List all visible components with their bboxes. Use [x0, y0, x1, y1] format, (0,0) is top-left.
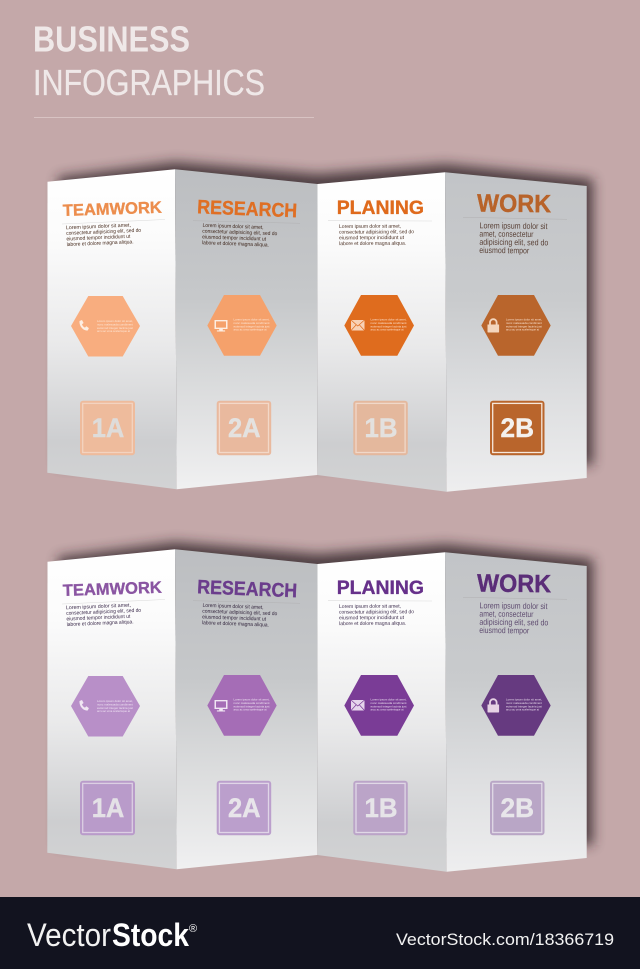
hexagon with monitor icon: Lorem ipsum dolor sit amet, — [234, 698, 270, 702]
hexagon with envelope icon: euismod integer lacinia just — [370, 704, 407, 708]
hexagon with phone icon: Lorem ipsum dolor sit amet, — [97, 319, 133, 323]
heading: teamwork: TEAMWORK — [63, 199, 162, 220]
hexagon with phone icon: Lorem ipsum dolor sit amet, — [97, 699, 133, 703]
heading: research: RESEARCH — [197, 196, 298, 222]
body text — [479, 600, 549, 636]
hexagon with lock icon: nunc malesuada condiment — [506, 701, 542, 705]
hexagon with monitor icon: euismod integer lacinia just — [234, 324, 270, 328]
hexagon with phone icon: arcu ac urna scelerisque at — [97, 329, 130, 333]
fold: planing — [317, 172, 447, 492]
body text: eiusmod tempor incididunt ut — [66, 234, 131, 242]
badge 1B — [353, 401, 408, 455]
body text: labore et dolore magna aliqua. — [202, 620, 269, 629]
heading: research: RESEARCH — [197, 576, 298, 602]
badge 1A: 1A — [92, 413, 124, 443]
hexagon with phone icon: euismod integer lacinia just — [97, 706, 133, 710]
body text: eiusmod tempor — [479, 245, 529, 255]
hexagon with phone icon: arcu ac urna scelerisque at — [97, 709, 130, 713]
badge 1A — [80, 781, 135, 835]
VectorStock logo: Stock — [112, 917, 189, 953]
body text — [202, 603, 278, 629]
body text: consectetur adipisicing elit, sed do — [202, 609, 277, 617]
hexagon with phone icon: nunc malesuada condiment — [97, 702, 133, 706]
hexagon with monitor icon: nunc malesuada condiment — [234, 321, 270, 325]
hexagon with envelope icon — [344, 675, 414, 736]
hexagon with monitor icon — [207, 675, 277, 736]
fold: research — [175, 169, 318, 489]
hexagon with phone icon: nunc malesuada condiment — [97, 322, 133, 326]
badge 2B: 2B — [500, 793, 534, 823]
hexagon with lock icon: Lorem ipsum dolor sit amet, — [506, 698, 542, 702]
body text — [479, 220, 549, 256]
badge 2B — [490, 401, 544, 455]
body text: consectetur adipisicing elit, sed do — [66, 608, 141, 617]
body text: Lorem ipsum dolor sit amet, — [339, 224, 401, 230]
hexagon with monitor icon: arcu ac urna scelerisque at — [234, 328, 267, 332]
body text — [66, 222, 142, 248]
body text: Lorem ipsum dolor sit amet, — [202, 223, 264, 231]
body text: Lorem ipsum dolor sit amet, — [339, 604, 401, 610]
body text: labore et dolore magna aliqua. — [339, 621, 406, 627]
panel: orange folded brochure — [47, 162, 593, 492]
body text: labore et dolore magna aliqua. — [67, 239, 134, 248]
hexagon with lock icon: euismod integer lacinia just — [506, 704, 542, 708]
heading: planing: PLANING — [337, 197, 424, 219]
footer bar — [0, 897, 640, 969]
brochure shadow — [58, 542, 593, 845]
body text: amet, consectetur — [479, 228, 534, 239]
body text: amet, consectetur — [479, 608, 534, 619]
hexagon with envelope icon: Lorem ipsum dolor sit amet, — [370, 698, 407, 702]
badge 1B: 1B — [364, 793, 398, 823]
body text: eiusmod tempor — [479, 625, 529, 635]
body text: Lorem ipsum dolor sit — [479, 600, 548, 611]
heading: work: WORK — [477, 570, 551, 598]
hexagon with lock icon: arcu ac urna scelerisque at — [506, 708, 539, 712]
hexagon with monitor icon — [207, 295, 277, 356]
hexagon with lock icon — [481, 295, 551, 356]
badge 1A — [80, 401, 135, 455]
VectorStock logo — [27, 917, 197, 953]
badge 1B: 1B — [364, 413, 398, 443]
hexagon with lock icon: arcu ac urna scelerisque at — [506, 328, 539, 332]
panel: purple folded brochure — [47, 542, 593, 872]
badge 2A: 2A — [228, 413, 261, 443]
body text — [339, 604, 414, 627]
body text: adipisicing elit, sed do — [479, 237, 549, 247]
badge 2B — [490, 781, 544, 835]
image id: VectorStock.com/18366719 — [396, 930, 614, 949]
body text: labore et dolore magna aliqua. — [67, 619, 134, 628]
badge 2B: 2B — [500, 413, 534, 443]
body text: eiusmod tempor incididunt ut — [202, 614, 267, 623]
body text: eiusmod tempor incididunt ut — [66, 614, 131, 622]
hexagon with envelope icon — [344, 295, 414, 356]
title: INFOGRAPHICS — [33, 62, 265, 103]
body text: Lorem ipsum dolor sit — [479, 220, 548, 231]
title: BUSINESS — [33, 18, 190, 60]
VectorStock logo: ® — [189, 923, 197, 935]
body text — [202, 223, 278, 249]
hexagon with envelope icon: arcu ac urna scelerisque at — [370, 708, 404, 712]
hexagon with lock icon: euismod integer lacinia just — [506, 324, 542, 328]
hexagon with lock icon: nunc malesuada condiment — [506, 321, 542, 325]
hexagon with monitor icon: arcu ac urna scelerisque at — [234, 708, 267, 712]
body text: Lorem ipsum dolor sit amet, — [66, 603, 131, 611]
body text: consectetur adipisicing elit, sed do — [339, 609, 414, 616]
body text: Lorem ipsum dolor sit amet, — [66, 223, 131, 231]
hexagon with monitor icon: Lorem ipsum dolor sit amet, — [234, 318, 270, 322]
hexagon with envelope icon: Lorem ipsum dolor sit amet, — [370, 318, 407, 322]
body text: labore et dolore magna aliqua. — [202, 240, 269, 249]
badge 2A — [217, 401, 271, 455]
hexagon with phone icon: euismod integer lacinia just — [97, 326, 133, 330]
hexagon with envelope icon: nunc malesuada condiment — [370, 321, 407, 325]
brochure shadow — [58, 162, 593, 465]
hexagon with monitor icon: euismod integer lacinia just — [234, 704, 270, 708]
hexagon with monitor icon: nunc malesuada condiment — [234, 701, 270, 705]
body text: eiusmod tempor incididunt ut — [202, 234, 267, 243]
body text: Lorem ipsum dolor sit amet, — [202, 603, 264, 611]
body text: eiusmod tempor incididunt ut — [339, 235, 405, 241]
hexagon with lock icon — [481, 675, 551, 736]
hexagon with phone icon — [71, 676, 140, 736]
heading: teamwork: TEAMWORK — [63, 579, 162, 600]
body text: consectetur adipisicing elit, sed do — [66, 228, 141, 237]
body text: eiusmod tempor incididunt ut — [339, 615, 405, 621]
hexagon with lock icon: Lorem ipsum dolor sit amet, — [506, 318, 542, 322]
badge 1B — [353, 781, 408, 835]
body text: consectetur adipisicing elit, sed do — [202, 229, 277, 237]
fold: teamwork — [47, 549, 177, 869]
body text — [66, 602, 142, 628]
body text — [339, 224, 414, 247]
body text: consectetur adipisicing elit, sed do — [339, 229, 414, 236]
badge 2A: 2A — [228, 793, 261, 823]
heading: planing: PLANING — [337, 577, 424, 599]
hexagon with envelope icon: arcu ac urna scelerisque at — [370, 328, 404, 332]
body text: adipisicing elit, sed do — [479, 617, 549, 627]
fold: work — [445, 172, 587, 492]
body text: labore et dolore magna aliqua. — [339, 241, 406, 247]
badge 2A — [217, 781, 271, 835]
fold: work — [445, 552, 587, 872]
fold: teamwork — [47, 169, 177, 489]
title — [33, 18, 314, 118]
heading: work: WORK — [477, 190, 551, 218]
hexagon with phone icon — [71, 296, 140, 356]
badge 1A: 1A — [92, 793, 124, 823]
VectorStock logo: Vector — [27, 917, 111, 953]
fold: planing — [317, 552, 447, 872]
hexagon with envelope icon: nunc malesuada condiment — [370, 701, 407, 705]
fold: research — [175, 549, 318, 869]
hexagon with envelope icon: euismod integer lacinia just — [370, 324, 407, 328]
